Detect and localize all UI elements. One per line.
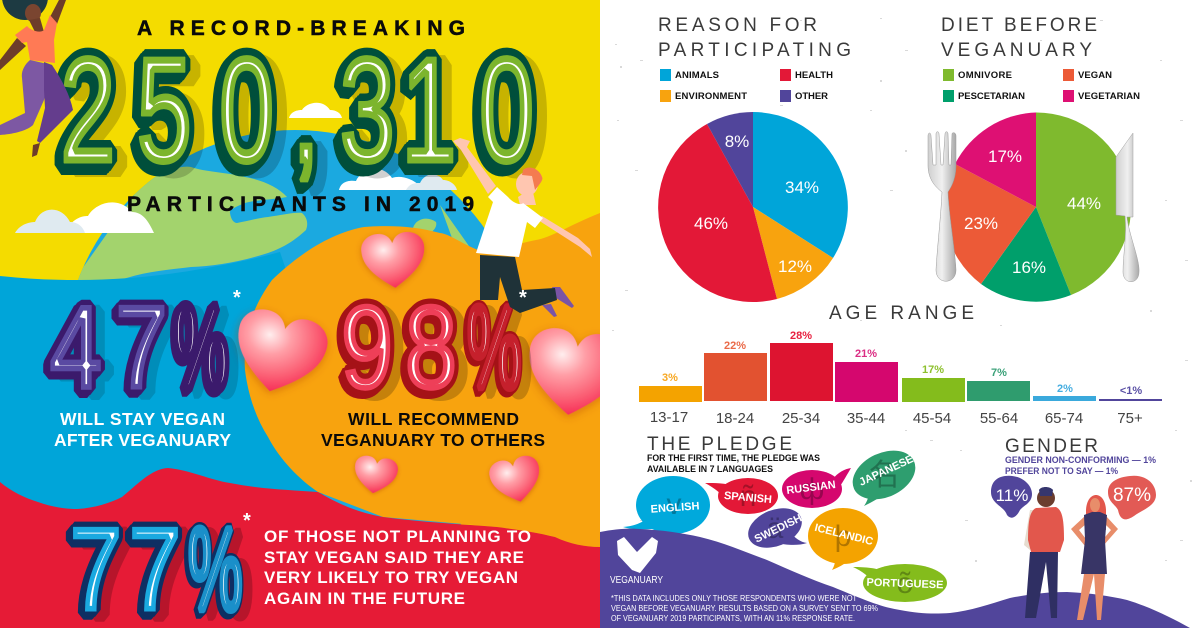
speech bubble: swedish <box>742 501 808 555</box>
stat: 98% <box>336 298 532 401</box>
heading: the pledge: THE PLEDGE <box>647 434 792 455</box>
legend: diet <box>943 69 1140 102</box>
icon: heart top <box>360 231 427 290</box>
callout: 11%: 11% <box>996 486 1028 505</box>
number 98 digits: 98 <box>341 281 457 413</box>
number 47 percent sign: % <box>183 286 238 418</box>
heading: diet before veganuary: VEGANUARY <box>941 40 1092 61</box>
icon: heart left <box>232 308 330 396</box>
legend: reason: ENVIRONMENT <box>675 91 747 102</box>
illustration: standing man <box>1024 487 1064 618</box>
pie chart: diet before veganuary: 17% <box>988 147 1022 166</box>
illustration: globe <box>78 130 484 524</box>
panel: purple footer wave <box>600 529 1190 628</box>
headline: participants in 2019: PARTICIPANTS IN 2019 <box>127 193 474 216</box>
number 98 percent sign: % <box>467 281 522 413</box>
number 47 percent sign: % <box>174 281 229 413</box>
pie chart: reason for participating: 46% <box>694 214 728 233</box>
number 47 digits: 47 <box>59 286 177 418</box>
speech bubble: russian: ф <box>800 473 824 506</box>
legend: diet: VEGETARIAN <box>1078 91 1140 102</box>
number 47 percent sign <box>170 300 238 400</box>
number 47 digits <box>43 300 174 400</box>
bar chart: age range: <1% <box>1120 385 1142 397</box>
bar chart: age range: 21% <box>855 348 877 360</box>
caption: will stay vegan: WILL STAY VEGAN <box>60 409 225 429</box>
icon: heart right <box>526 327 600 419</box>
caption: of those not planning: AGAIN IN THE FUTURE <box>264 589 465 608</box>
bar chart: age range: 65-74 <box>1045 410 1083 427</box>
bar chart: age range: 22% <box>724 340 746 352</box>
number 98 percent sign: % <box>467 281 522 413</box>
number 47 percent sign: % <box>171 284 226 416</box>
big number: 250,310: 250,310 <box>60 27 534 193</box>
speech bubble: spanish: SPANISH <box>723 490 772 506</box>
legend: reason: OTHER <box>795 91 828 102</box>
bar chart: age range: 75+ <box>1117 410 1143 427</box>
heading: gender: GENDER <box>1005 436 1098 457</box>
heading: diet before veganuary: DIET BEFORE <box>941 15 1097 36</box>
big number: 250,310: 250,310 <box>70 33 544 199</box>
legend: diet: VEGAN <box>1078 70 1112 81</box>
speech bubble: portuguese: PORTUGUESE <box>866 577 944 591</box>
number 98 percent sign <box>463 300 532 400</box>
caption: of those not planning: OF THOSE NOT PLANNING TO <box>264 527 531 546</box>
bar chart: age range: 25-34 <box>782 410 820 427</box>
text: gender notes: PREFER NOT TO SAY — 1% <box>1005 466 1118 476</box>
footnote: *THIS DATA INCLUDES ONLY THOSE RESPONDENTS WHO WERE NOT <box>611 594 857 603</box>
speech bubble: portuguese: õ <box>897 567 913 600</box>
bar chart: age range: 17% <box>922 364 944 376</box>
big number: 250,310: 250,310 <box>56 31 530 197</box>
asterisk 98: * <box>519 287 527 309</box>
speech bubble: portuguese <box>853 564 947 602</box>
number 77 percent sign <box>184 522 252 622</box>
pie chart: diet before veganuary: 44% <box>1067 194 1101 213</box>
legend: reason: ANIMALS <box>675 70 719 81</box>
heading: diet before veganuary <box>941 15 1097 61</box>
panel: left headline background <box>0 0 626 628</box>
bar chart: age range: 45-54 <box>913 410 951 427</box>
heading: age range: AGE RANGE <box>829 303 974 324</box>
illustration: standing woman <box>1071 495 1118 620</box>
number 47 percent sign: % <box>174 281 229 413</box>
stat: 47% <box>43 300 238 400</box>
speech bubble: russian <box>782 468 851 508</box>
speech bubble: english: ENGLISH <box>650 500 700 516</box>
bar chart: age range: 3% <box>662 372 678 384</box>
big number: 250,310: 250,310 <box>60 27 534 193</box>
caption: will recommend: VEGANUARY TO OTHERS <box>321 430 545 450</box>
bar chart: age range: 35-44 <box>847 410 885 427</box>
text: pledge subtitle: AVAILABLE IN 7 LANGUAGES <box>647 464 773 474</box>
speech bubble: russian: RUSSIAN <box>786 479 836 497</box>
pie chart: diet before veganuary <box>944 112 1131 302</box>
cloud: small top <box>289 103 342 118</box>
asterisk 77: * <box>243 510 251 532</box>
number 98 digits: 98 <box>341 281 457 413</box>
text: gender notes: GENDER NON-CONFORMING — 1% <box>1005 455 1156 465</box>
icon: heart small right <box>488 455 542 504</box>
pie chart: reason for participating: 12% <box>778 257 812 276</box>
panel: red wave <box>0 468 600 628</box>
caption: of those not planning: VERY LIKELY TO TRY VEGAN <box>264 568 518 587</box>
pie chart: reason for participating: 8% <box>725 132 749 151</box>
asterisk 47: * <box>233 287 241 309</box>
panel: blue band <box>0 252 324 509</box>
bar chart: age range: 28% <box>790 330 812 342</box>
speech bubble: spanish: ñ <box>740 480 756 513</box>
callout: 87% <box>1108 476 1156 519</box>
legend: reason: HEALTH <box>795 70 833 81</box>
logo: veganuary heart <box>610 537 663 586</box>
illustration: jumping woman <box>0 0 73 157</box>
panel: right background specks <box>612 18 1192 562</box>
speech bubble: japanese: 名 <box>869 459 899 492</box>
speech bubble: japanese <box>845 441 923 509</box>
bar chart: age range: 7% <box>991 367 1007 379</box>
icon: heart small left <box>352 454 399 496</box>
pie chart: reason for participating: 34% <box>785 178 819 197</box>
caption: will stay vegan <box>54 413 231 446</box>
legend: reason <box>660 69 833 102</box>
speech bubble: icelandic: þ <box>835 520 851 553</box>
cloud: lower left <box>15 202 154 233</box>
caption: will recommend <box>321 413 544 446</box>
icon: knife <box>1116 133 1139 282</box>
speech bubble: swedish: ä <box>767 512 784 545</box>
legend: diet: PESCETARIAN <box>958 91 1025 102</box>
stat: 77% <box>66 522 252 622</box>
footnote <box>611 594 878 623</box>
illustration: jumping man <box>453 138 592 317</box>
heading: reason for participating <box>658 15 851 61</box>
speech bubble: icelandic: ICELANDIC <box>813 522 874 548</box>
legend: diet: OMNIVORE <box>958 70 1012 81</box>
caption: will stay vegan: AFTER VEGANUARY <box>54 430 231 450</box>
panel: orange blob <box>245 213 600 547</box>
speech bubble: swedish: SWEDISH <box>753 512 804 546</box>
caption: will recommend: WILL RECOMMEND <box>348 409 519 429</box>
number 98 digits: 98 <box>350 286 466 418</box>
speech bubble: english: v <box>666 488 682 521</box>
text: pledge subtitle: FOR THE FIRST TIME, THE PLEDGE WAS <box>647 453 820 463</box>
icon: fork <box>928 132 956 281</box>
heading: reason for participating: REASON FOR <box>658 15 817 36</box>
text: pledge subtitle <box>647 453 820 474</box>
number 47 digits: 47 <box>47 284 165 416</box>
speech bubble: spanish <box>705 478 778 514</box>
pie chart: diet before veganuary: 16% <box>1012 258 1046 277</box>
callout: 11% <box>991 476 1032 518</box>
speech bubble: english <box>623 476 710 534</box>
heading: reason for participating: PARTICIPATING <box>658 40 851 61</box>
number 98 percent sign: % <box>464 284 519 416</box>
pie chart: reason for participating <box>658 112 848 302</box>
cloud: over globe <box>339 169 457 190</box>
footnote: OF VEGANUARY 2019 PARTICIPANTS, WITH AN 11% RESPONSE RATE. <box>611 614 855 623</box>
bar chart: age range: 2% <box>1057 383 1073 395</box>
text: gender notes <box>1005 455 1156 476</box>
logo: veganuary heart: VEGANUARY <box>610 574 663 586</box>
bar chart: age range: 55-64 <box>980 410 1018 427</box>
big number: 250,310: 250,310 <box>58 29 532 195</box>
speech bubble: icelandic <box>808 508 878 570</box>
number 98 percent sign: % <box>476 286 531 418</box>
number 47 digits: 47 <box>50 281 168 413</box>
pie chart: diet before veganuary: 23% <box>964 214 998 233</box>
caption: of those not planning: STAY VEGAN SAID THEY ARE <box>264 548 524 567</box>
number 47 digits: 47 <box>50 281 168 413</box>
number 98 digits: 98 <box>338 284 454 416</box>
footnote: VEGAN BEFORE VEGANUARY. RESULTS BASED ON A SURVEY SENT TO 69% <box>611 604 878 613</box>
bar chart: age range: 13-17 <box>650 409 688 426</box>
speech bubble: japanese: JAPANESE <box>857 453 915 489</box>
bar chart: age range: 18-24 <box>716 410 754 427</box>
caption: of those not planning <box>264 527 531 608</box>
bar chart: age range <box>639 330 1162 427</box>
callout: 87%: 87% <box>1113 485 1151 506</box>
headline: a record-breaking: A RECORD-BREAKING <box>137 17 465 40</box>
